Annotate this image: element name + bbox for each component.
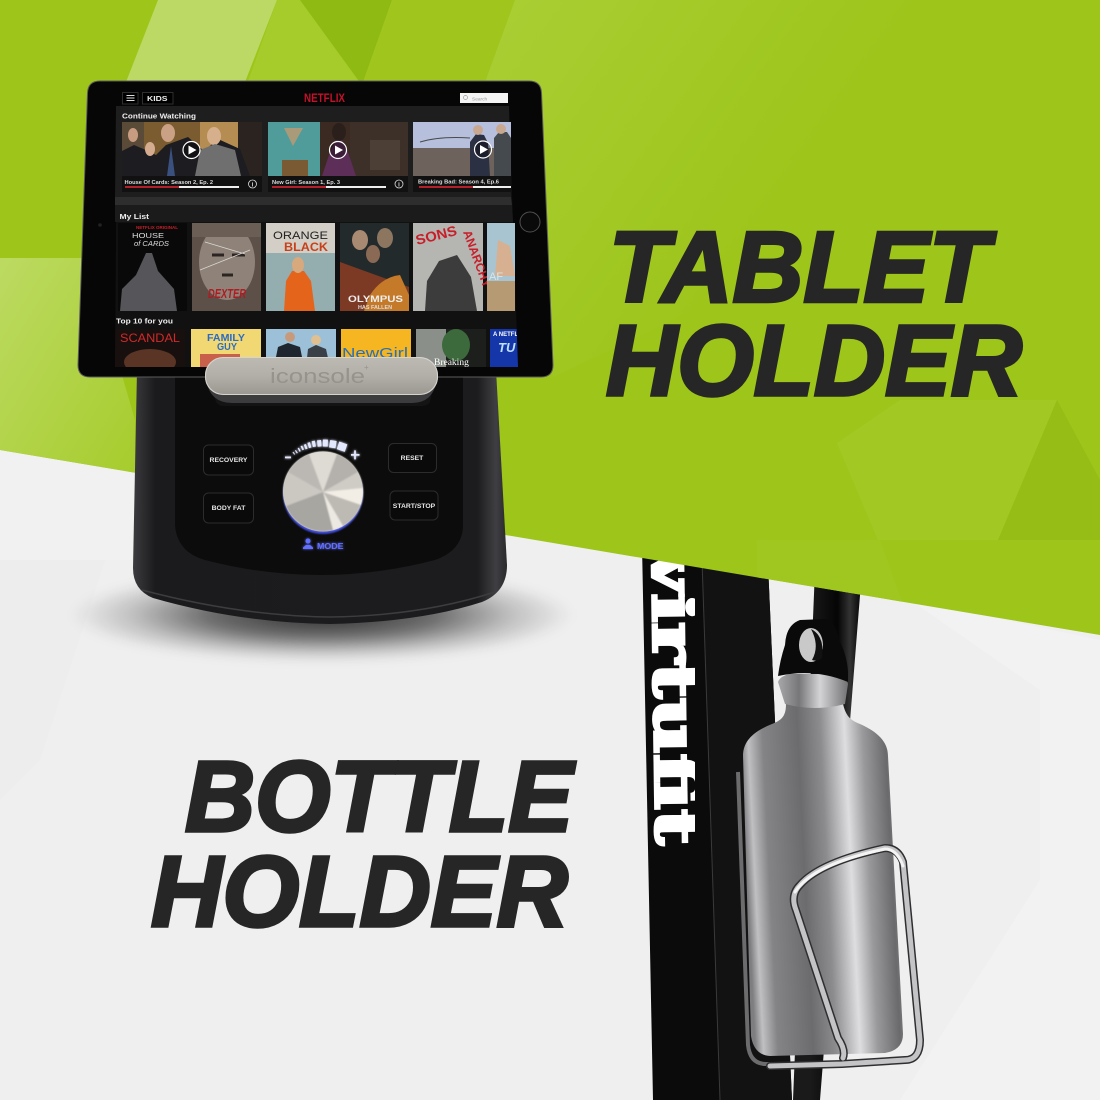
poster: sons of anarchy <box>413 222 494 311</box>
poster: house of cards: of CARDS <box>134 239 169 248</box>
iconsole logo: iconsole <box>270 366 365 388</box>
tablet bracket <box>205 357 438 406</box>
button: start/stop <box>390 491 438 520</box>
poster: breaking bad <box>416 329 486 368</box>
poster: netflix original: A NETFLI <box>493 332 520 338</box>
poster: scandal <box>120 334 180 367</box>
poster: orange is the new black: BLACK <box>284 240 328 254</box>
icon: menu <box>126 96 134 100</box>
poster: drama <box>266 329 336 357</box>
control knob <box>283 451 363 534</box>
button: recovery <box>204 445 254 475</box>
row heading: my list: My List <box>120 212 150 221</box>
thumbnail: house of cards <box>122 122 262 192</box>
thumbnail: breaking bad <box>413 122 511 192</box>
poster: netflix original <box>490 329 520 367</box>
title: bottle holder <box>151 741 576 948</box>
row heading: top 10: Top 10 for you <box>116 316 173 326</box>
console body <box>133 370 507 624</box>
poster: orange is the new black <box>266 223 335 311</box>
thumbnail: house of cards: House Of Cards: Season 2, Ep. 2 <box>124 180 213 186</box>
title: bottle holder: HOLDER <box>151 836 568 948</box>
plus sign <box>351 450 360 459</box>
button: reset: RESET <box>401 455 424 462</box>
tablet bracket: + <box>364 363 369 372</box>
app screen <box>115 91 520 375</box>
thumbnail: breaking bad: Breaking Bad: Season 4, Ep.6 <box>418 180 499 186</box>
water bottle in cage <box>738 619 920 1066</box>
poster row: top 10 <box>120 329 518 367</box>
search box: Search <box>472 96 488 102</box>
poster: scandal: SCANDAL <box>120 331 180 345</box>
button: start/stop: START/STOP <box>393 503 436 510</box>
poster: house of cards <box>118 223 187 311</box>
icon: camera <box>98 223 102 227</box>
minus sign <box>285 456 291 458</box>
rear cage arm <box>738 772 840 1066</box>
poster: orange is the new black: ORANGE <box>273 230 328 242</box>
button: reset <box>388 444 436 472</box>
bottle neck <box>778 674 848 708</box>
poster: safe haven <box>487 223 515 311</box>
mode label <box>303 538 344 551</box>
thumbnail: new girl: New Girl: Season 1, Ep. 3 <box>272 180 340 186</box>
poster: netflix original: TU <box>498 340 516 355</box>
thumbnail: house of cards: i <box>252 182 254 188</box>
play buttons <box>183 141 492 158</box>
poster: breaking bad: Breaking <box>434 358 469 368</box>
icon: person <box>303 538 313 549</box>
bottle body <box>743 704 903 1056</box>
title: tablet holder: TABLET <box>609 212 997 324</box>
thumbnail: new girl: i <box>398 182 400 188</box>
tablet <box>78 81 553 377</box>
bottle cap <box>778 619 848 682</box>
poster: olympus has fallen: HAS FALLEN <box>358 305 392 311</box>
poster: house of cards: NETFLIX ORIGINAL <box>136 225 178 230</box>
poster: family guy: FAMILY <box>207 333 245 344</box>
poster: family guy: GUY <box>217 342 237 353</box>
poster: new girl <box>341 329 411 357</box>
bike post with virtufit branding <box>638 545 862 1100</box>
netflix logo: NETFLIX <box>304 91 345 105</box>
poster: sons of anarchy: ANARCHY <box>460 228 494 289</box>
button: body fat <box>204 493 254 523</box>
button: body fat: BODY FAT <box>212 505 246 512</box>
front cage loop <box>770 848 920 1066</box>
poster: house of cards: HOUSE <box>132 231 164 240</box>
poster: new girl: NewGirl <box>342 345 408 362</box>
thumbnail: new girl <box>268 122 408 192</box>
title: tablet holder: HOLDER <box>606 305 1022 417</box>
control panel <box>175 370 463 575</box>
title: tablet holder <box>606 212 1022 417</box>
poster: dexter: DEXTER <box>208 286 246 301</box>
poster: dexter <box>192 223 261 311</box>
brand lettering: virtufit <box>638 546 711 845</box>
poster: family guy <box>191 329 261 367</box>
button: recovery: RECOVERY <box>210 457 248 464</box>
green angled background panel <box>0 0 1100 640</box>
icon: home button <box>520 212 540 232</box>
mode label: MODE <box>317 541 344 551</box>
console shadow <box>70 568 574 662</box>
poster: olympus has fallen <box>340 223 409 311</box>
poster: olympus has fallen: OLYMPUS <box>348 294 403 304</box>
level gauge <box>285 439 360 459</box>
search box <box>460 93 508 103</box>
poster: safe haven: AF <box>489 271 503 283</box>
header buttons <box>122 92 173 104</box>
kids label: KIDS <box>147 96 168 103</box>
row heading: continue watching: Continue Watching <box>122 112 196 120</box>
poster: sons of anarchy: SONS <box>414 222 458 248</box>
rear support tube <box>793 570 862 1100</box>
title: bottle holder: BOTTLE <box>185 741 576 853</box>
